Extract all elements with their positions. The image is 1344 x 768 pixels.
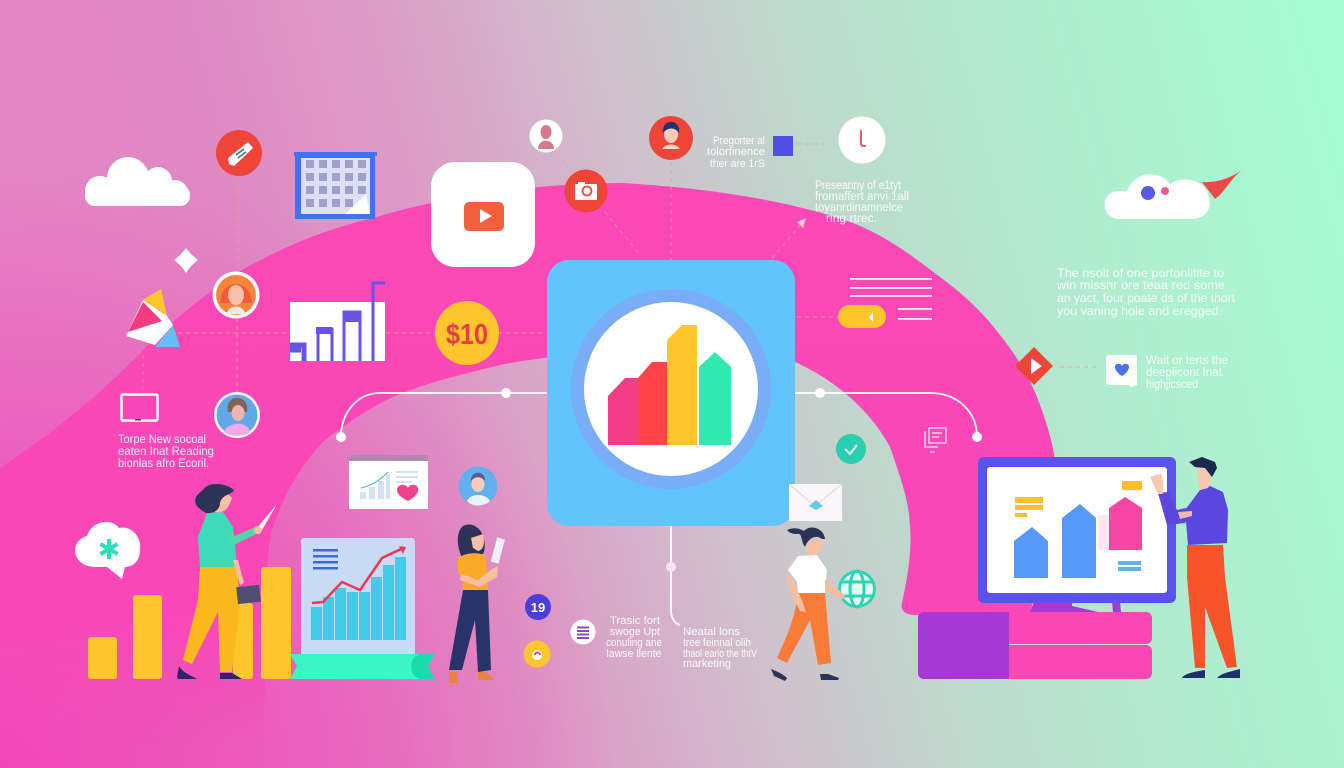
text block: bottom centre left: swoge Upt [610,626,660,638]
connector nodes [336,388,982,572]
text block: top centre: Pregorter al [713,135,765,147]
text block: right paragraph [1056,266,1236,318]
coin: $10: $10 [446,319,488,351]
icon: ticket badge [216,130,262,176]
toggle pill [838,305,886,328]
icon: cloud right with comet [1105,170,1242,219]
white connector lines [341,393,977,625]
dashed connectors [143,144,1100,653]
icon: check badge [836,434,866,464]
text block: left caption: eaten Inat Reading [118,446,214,458]
text block: right paragraph: win misshr ore teaa red some [1056,278,1225,292]
icon: play diamond [1015,347,1053,385]
text block: left caption [118,434,214,470]
text block: bottom centre right: marketing [683,658,731,670]
email card: heart chart [349,455,428,509]
speech cloud with asterisk [75,522,140,579]
avatar: man [458,466,498,506]
icon: clock [838,116,886,164]
text block: wait caption: highjicsced [1146,379,1198,391]
text block: wait caption: deeplicont Inat [1146,367,1223,379]
icon: chat heart [1106,355,1137,387]
stacked platform [918,612,1152,679]
icon: list badge [570,620,596,644]
text block: bottom centre right [683,626,758,670]
text block: right paragraph: an yact, four poate ds of the thort [1057,291,1236,305]
icon: blue square [773,136,793,156]
text block: left caption: bionlas afro Ecoril. [118,458,209,470]
text block: right paragraph: you vaning hole and eregged. [1057,304,1222,318]
text block: bottom centre left: Trasic fort [610,615,660,627]
figure: man presenting [1150,457,1240,678]
coin: $10 [435,301,499,365]
icon: camera badge [564,170,608,212]
central panel [547,260,795,526]
avatar: orange hair [212,272,260,318]
text block: upper right: fromaffert anvi 1all [815,191,909,203]
monitor [978,457,1176,612]
figure: woman with globe [771,528,876,681]
badge: 19: 19 [531,600,545,615]
icon: documents [925,428,946,452]
avatar: user silhouette [530,120,562,152]
ribbon banner [290,654,435,679]
text block: upper right: ring rtrec. [826,213,877,225]
icon: cloud left [85,157,190,206]
text block: bottom centre left [606,615,662,660]
text block: left caption: Torpe New socoal [118,434,206,446]
text block: wait caption: Wait or terts the [1146,355,1228,367]
text block: bottom centre left: conuling ane [606,637,662,649]
icon: envelope [789,484,842,521]
text block: bottom centre right: tree feinnal olih [683,637,751,649]
text block: upper right: Preseanny of e1tyt [815,180,902,192]
list lines [850,278,932,320]
text block: top centre: tolorfinence [707,146,765,158]
text block: right paragraph: The nsolt of one portonlitite to [1057,266,1224,280]
arrow tip [797,218,806,228]
avatar: brown hair [214,392,260,438]
icon: origami shape [126,289,180,347]
figure: woman with phone [449,524,505,683]
icon: sparkle [174,248,198,273]
avatar: red badge [649,116,693,160]
text block: top centre [707,135,765,170]
text block: top centre: ther are 1гS [710,158,765,170]
central bar chart [608,325,731,445]
figure: woman with tablet [177,484,277,679]
icon: video tile [431,162,535,267]
icon: calendar [294,152,377,219]
icon: tablet [122,394,158,420]
bar chart icon [290,283,385,361]
text block: upper right: toyanrdinamnelce [815,202,903,214]
line chart card [301,538,415,656]
text block: bottom centre right: thaol eario the thtV [683,648,758,660]
text block: wait caption [1146,355,1228,391]
text block: bottom centre right: Neatal lons [683,626,741,638]
text block: upper right [815,180,909,225]
icon: yellow badge [524,640,550,668]
yellow bar chart [88,567,291,679]
badge: 19 [525,594,551,620]
text block: bottom centre left: lawse llente [606,648,662,660]
pink arch band [0,183,1055,768]
